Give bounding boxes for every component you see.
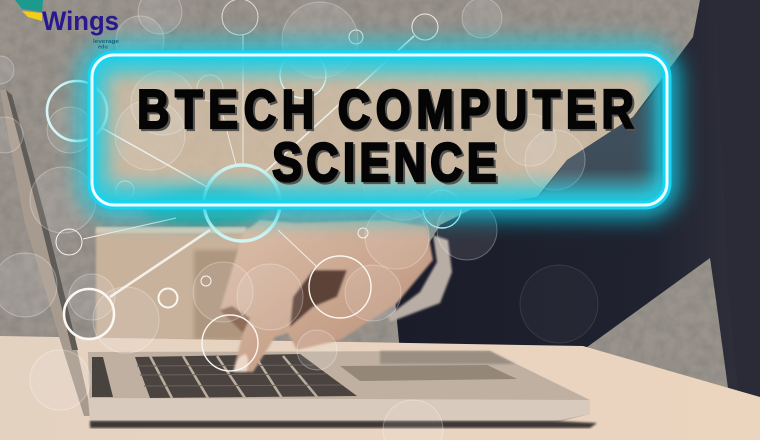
network lines: [83, 35, 414, 297]
title line 2 shadow: SCIENCE: [274, 133, 499, 195]
logo flag: [15, 0, 43, 21]
title line 1 shadow: BTECH COMPUTER: [139, 80, 636, 142]
laptop base: [88, 351, 597, 428]
desk: [0, 336, 760, 440]
dark sleeve bubble: [520, 265, 598, 343]
logo tagline edu: edu: [98, 44, 108, 50]
keyboard: [135, 354, 357, 398]
suit body and sleeve: [395, 0, 760, 397]
warm wall inside frame: [96, 60, 662, 200]
outline bubbles: [47, 0, 461, 371]
logo tagline: leverage: [93, 39, 119, 45]
title line 2: SCIENCE: [272, 131, 497, 193]
title line 1: BTECH COMPUTER: [137, 78, 634, 140]
translucent bubbles: [0, 0, 585, 440]
shirt cuff: [388, 235, 452, 322]
logo wordmark: Wings: [42, 6, 119, 36]
title: [137, 78, 636, 195]
hand: [220, 220, 433, 372]
laptop screen edge: [0, 90, 92, 416]
planter: [96, 190, 267, 340]
neon title frame: [92, 55, 667, 205]
logo: Wings: [15, 0, 119, 50]
